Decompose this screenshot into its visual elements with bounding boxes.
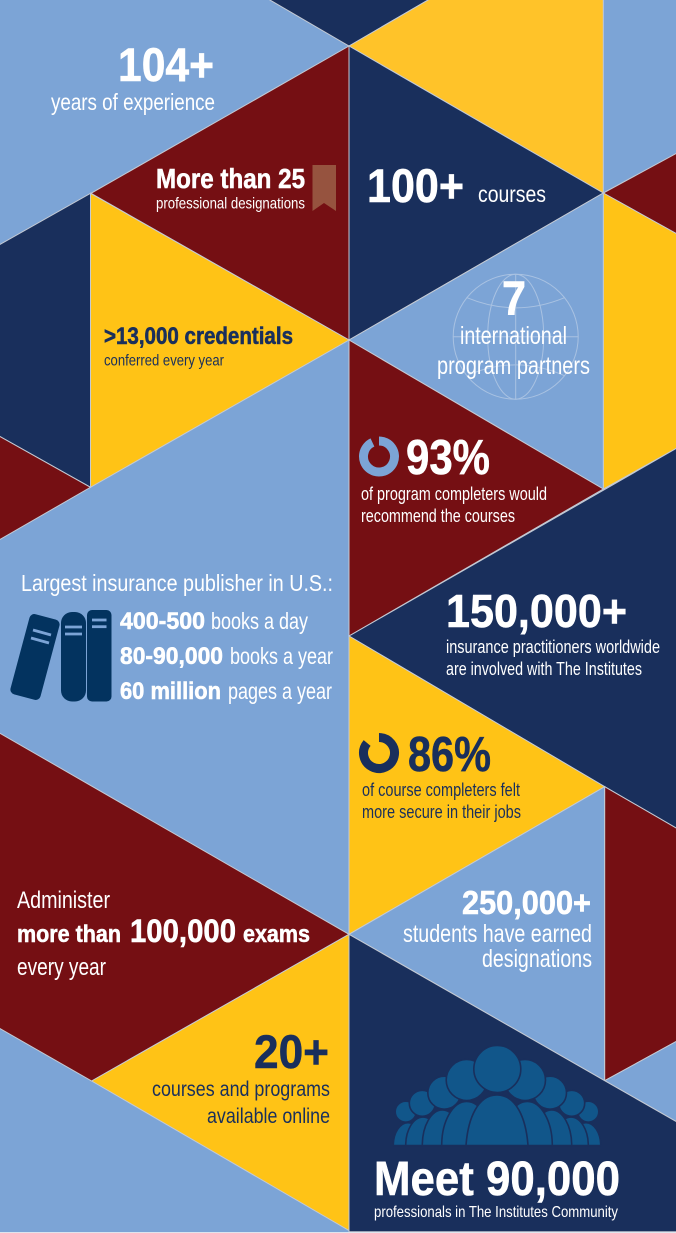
stat: 60 million: 60 million — [120, 678, 221, 705]
triangle: right blue lower — [605, 1041, 676, 1122]
stat: 100+: 100+ — [367, 159, 464, 212]
maroon triangle — [91, 46, 349, 340]
label: course completers line 1: of course completers felt — [362, 780, 520, 800]
panel: 100,000 exams — [0, 733, 349, 1081]
panel: 7 international partners — [349, 193, 603, 489]
panel: 100+ courses — [349, 46, 603, 340]
blue triangle — [349, 787, 605, 1081]
panel: more than 25 designations — [91, 46, 349, 340]
maroon triangle — [349, 340, 603, 636]
label: more than: more than — [17, 921, 121, 948]
label: students have earned: students have earned — [403, 920, 592, 948]
navy shape — [349, 448, 676, 828]
panel: 13,000 credentials — [90, 193, 349, 487]
stat: 93%: 93% — [406, 431, 490, 485]
panel: largest publisher — [9, 570, 333, 705]
label: every year: every year — [17, 954, 106, 981]
icon: 86% donut — [364, 738, 395, 768]
label: administer: Administer — [17, 887, 110, 914]
label: available online: available online — [207, 1105, 330, 1128]
navy triangle — [349, 46, 603, 340]
label: program completers line 2: recommend the courses — [361, 506, 515, 526]
icon: globe — [453, 274, 578, 399]
panel: right maroon lower — [605, 787, 676, 1081]
icon: crowd of people — [393, 1046, 601, 1146]
triangle: top yellow — [349, 0, 603, 193]
stat: 400-500: 400-500 — [120, 608, 205, 635]
stat: 86%: 86% — [408, 728, 491, 782]
panel: 250,000+ students — [349, 787, 605, 1081]
label: books a year: books a year — [230, 643, 333, 669]
panel: 104+ years — [51, 38, 215, 115]
panel: 86% more secure — [349, 636, 605, 934]
label: program partners: program partners — [437, 352, 590, 380]
stat: 150,000+: 150,000+ — [446, 585, 627, 637]
label: designations: designations — [482, 945, 592, 973]
label: courses and programs: courses and programs — [152, 1078, 330, 1101]
panel: 93% recommend — [349, 340, 603, 636]
panel: right yellow — [603, 193, 676, 489]
label: course completers line 2: more secure in their jobs — [362, 802, 521, 822]
blue triangle — [349, 193, 603, 489]
label: courses: courses — [478, 181, 546, 207]
icon: 93% donut — [363, 441, 394, 472]
label: program completers line 1: of program completers would — [361, 484, 547, 504]
triangle: top navy — [266, 0, 432, 46]
panel: left navy — [0, 193, 90, 487]
stat: 104+: 104+ — [118, 38, 214, 91]
stat: 20+: 20+ — [254, 1025, 329, 1078]
triangle: right maroon upper — [603, 153, 676, 234]
stat: 80-90,000: 80-90,000 — [120, 643, 223, 670]
panel: meet 90,000 — [349, 934, 676, 1232]
maroon shape — [0, 733, 349, 1081]
navy shape — [349, 934, 676, 1232]
label: exams: exams — [243, 921, 310, 948]
stat: 13,000 credentials: >13,000 credentials — [104, 323, 293, 350]
yellow triangle — [90, 193, 349, 487]
stat: meet 90,000: Meet 90,000 — [374, 1153, 620, 1206]
stat: 100,000: 100,000 — [130, 913, 236, 949]
stat: 250,000+: 250,000+ — [462, 884, 591, 921]
panel: 150,000+ practitioners — [349, 448, 676, 828]
panel: 20+ online — [92, 934, 349, 1230]
stat: 7: 7 — [502, 273, 526, 326]
label: books a day: books a day — [211, 608, 308, 634]
icon: bookmark — [312, 165, 336, 211]
label: professionals in the institutes community: professionals in The Institutes Community — [374, 1204, 618, 1221]
label: international: international — [460, 322, 567, 350]
label: conferred every year: conferred every year — [104, 352, 225, 370]
icon: books — [9, 610, 112, 702]
label: professional designations: professional designations — [156, 196, 305, 212]
label: years of experience: years of experience — [51, 89, 215, 115]
yellow triangle — [349, 636, 605, 934]
yellow triangle — [92, 934, 349, 1230]
triangle: left maroon — [0, 436, 90, 540]
heading: largest insurance publisher: Largest insurance publisher in U.S.: — [21, 570, 333, 596]
label: pages a year: pages a year — [228, 678, 332, 704]
stat: more than 25: More than 25 — [156, 163, 305, 194]
